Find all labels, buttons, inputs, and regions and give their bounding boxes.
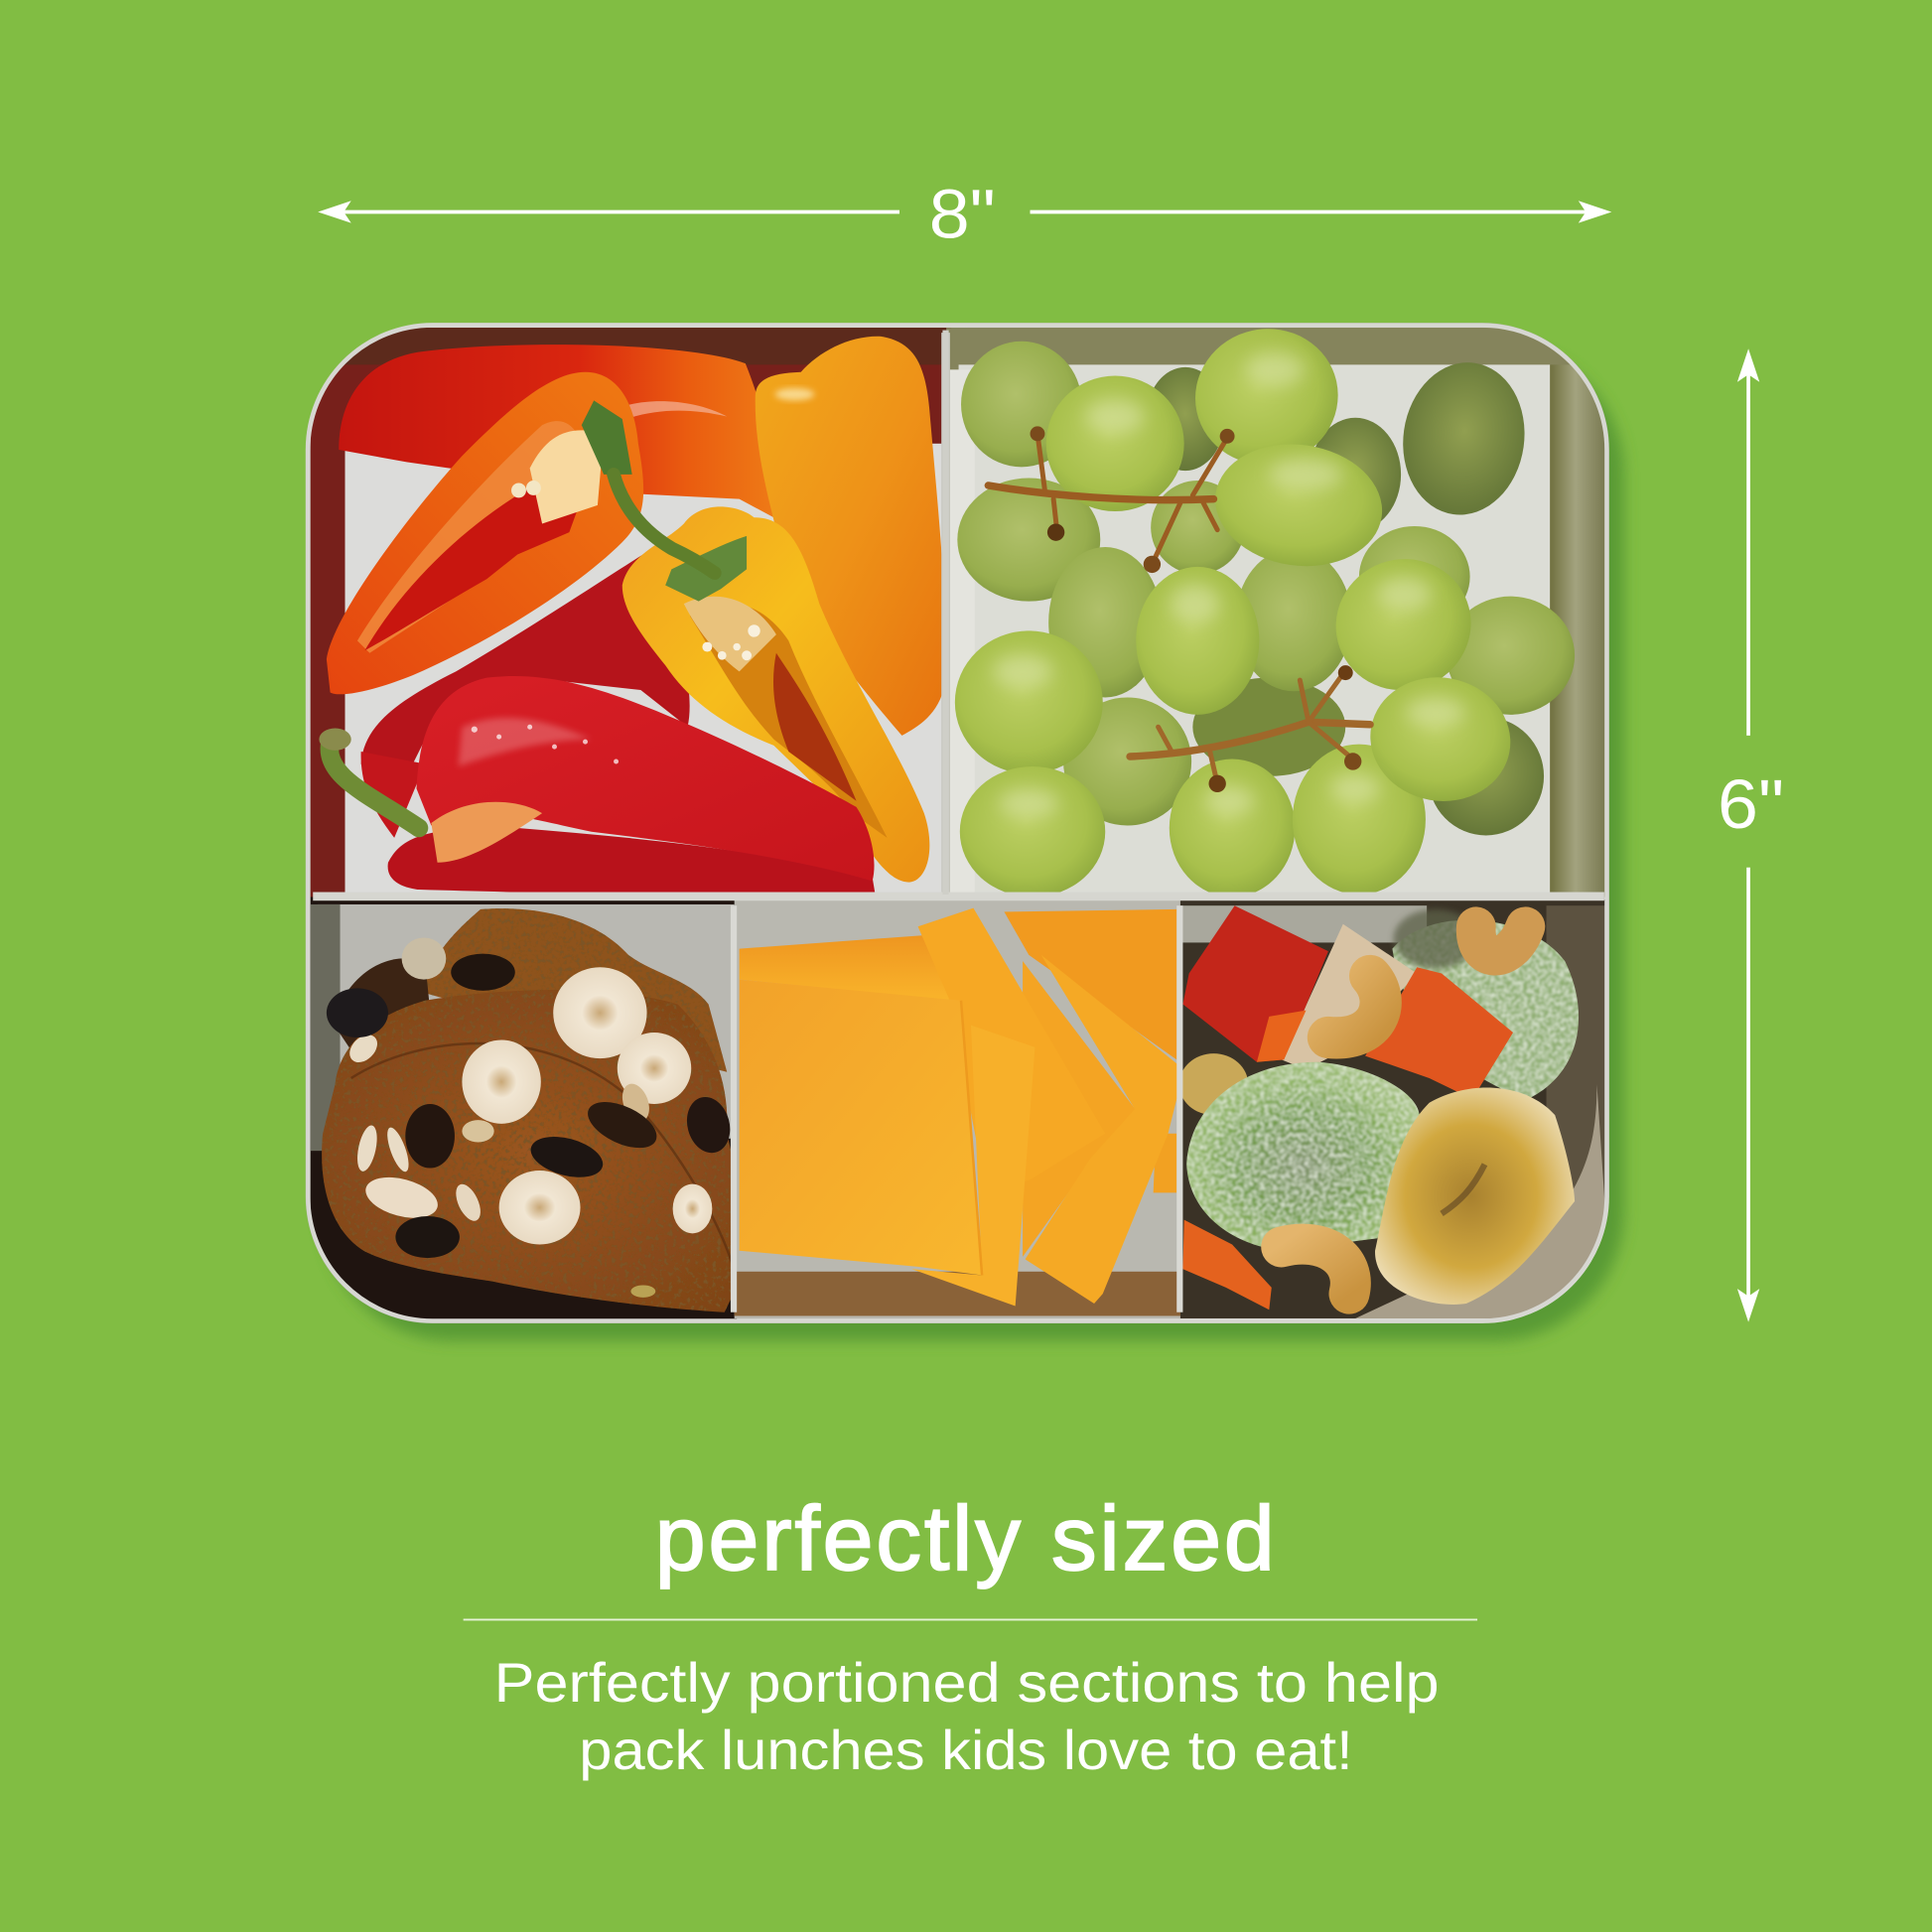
dimension arrow: width 8 inches: 8" xyxy=(929,176,996,253)
compartment: dried fruit and nuts xyxy=(1179,899,1608,1318)
tray shadow xyxy=(323,345,1624,1340)
hazelnuts xyxy=(553,967,647,1058)
tray rim xyxy=(308,326,1606,1320)
dimension arrow: width 8 inches xyxy=(318,176,1611,253)
cashew: bottom xyxy=(1282,1244,1350,1294)
grape stem: lower xyxy=(1130,670,1370,783)
dimension arrow: height 6 inches: 6" xyxy=(1718,765,1784,843)
pepper calyx: orange halved xyxy=(582,400,632,475)
grapes: front layer xyxy=(1046,376,1184,511)
description text: Perfectly portioned sections to help xyxy=(494,1651,1440,1714)
grape stem: upper xyxy=(988,434,1230,564)
dimension arrow: height 6 inches xyxy=(1718,348,1784,1322)
cracker: front xyxy=(322,990,742,1312)
infographic canvas xyxy=(306,189,1781,1781)
dried fruit: pale pineapple xyxy=(1282,924,1417,1069)
dried fruit: pale kiwi slice xyxy=(1392,920,1579,1099)
dried fruit: red papaya xyxy=(1182,905,1328,1062)
divider rule xyxy=(464,1618,1477,1620)
title: perfectly sized xyxy=(655,1488,1275,1589)
description text xyxy=(494,1651,1440,1781)
compartment: peppers xyxy=(311,328,959,897)
lunch tray xyxy=(306,316,1624,1340)
dried fruit: orange papaya xyxy=(1365,967,1513,1099)
pepper: yellow halved xyxy=(622,506,929,883)
pepper stem and calyx: yellow halved xyxy=(614,475,747,602)
compartment: cheese xyxy=(731,899,1184,1318)
compartment: grapes xyxy=(941,316,1606,899)
compartment: crackers xyxy=(311,897,742,1320)
pepper: dark red rear xyxy=(361,554,690,764)
grapes: back layer xyxy=(961,342,1082,467)
tray dividers xyxy=(313,331,1604,1312)
grape highlights xyxy=(993,352,1465,818)
tray body xyxy=(306,323,1609,1323)
cheese slices xyxy=(1004,909,1176,1059)
dried fruit: orange chip xyxy=(1182,1220,1272,1310)
dried fruit: banana chip xyxy=(1375,1087,1575,1305)
cracker: rear xyxy=(425,908,727,1072)
pepper: red-orange back xyxy=(339,345,774,517)
description text: pack lunches kids love to eat! xyxy=(579,1719,1353,1781)
cashew: top right xyxy=(1476,926,1525,956)
pepper: yellow-orange upright xyxy=(756,337,946,736)
pepper: red bottom half xyxy=(388,828,875,895)
cashew: middle xyxy=(1328,976,1381,1037)
dried fruit: kiwi slice xyxy=(1186,1062,1420,1251)
raisins xyxy=(451,954,515,991)
pepper: orange halved xyxy=(327,372,643,694)
pepper stem: red xyxy=(330,742,419,828)
